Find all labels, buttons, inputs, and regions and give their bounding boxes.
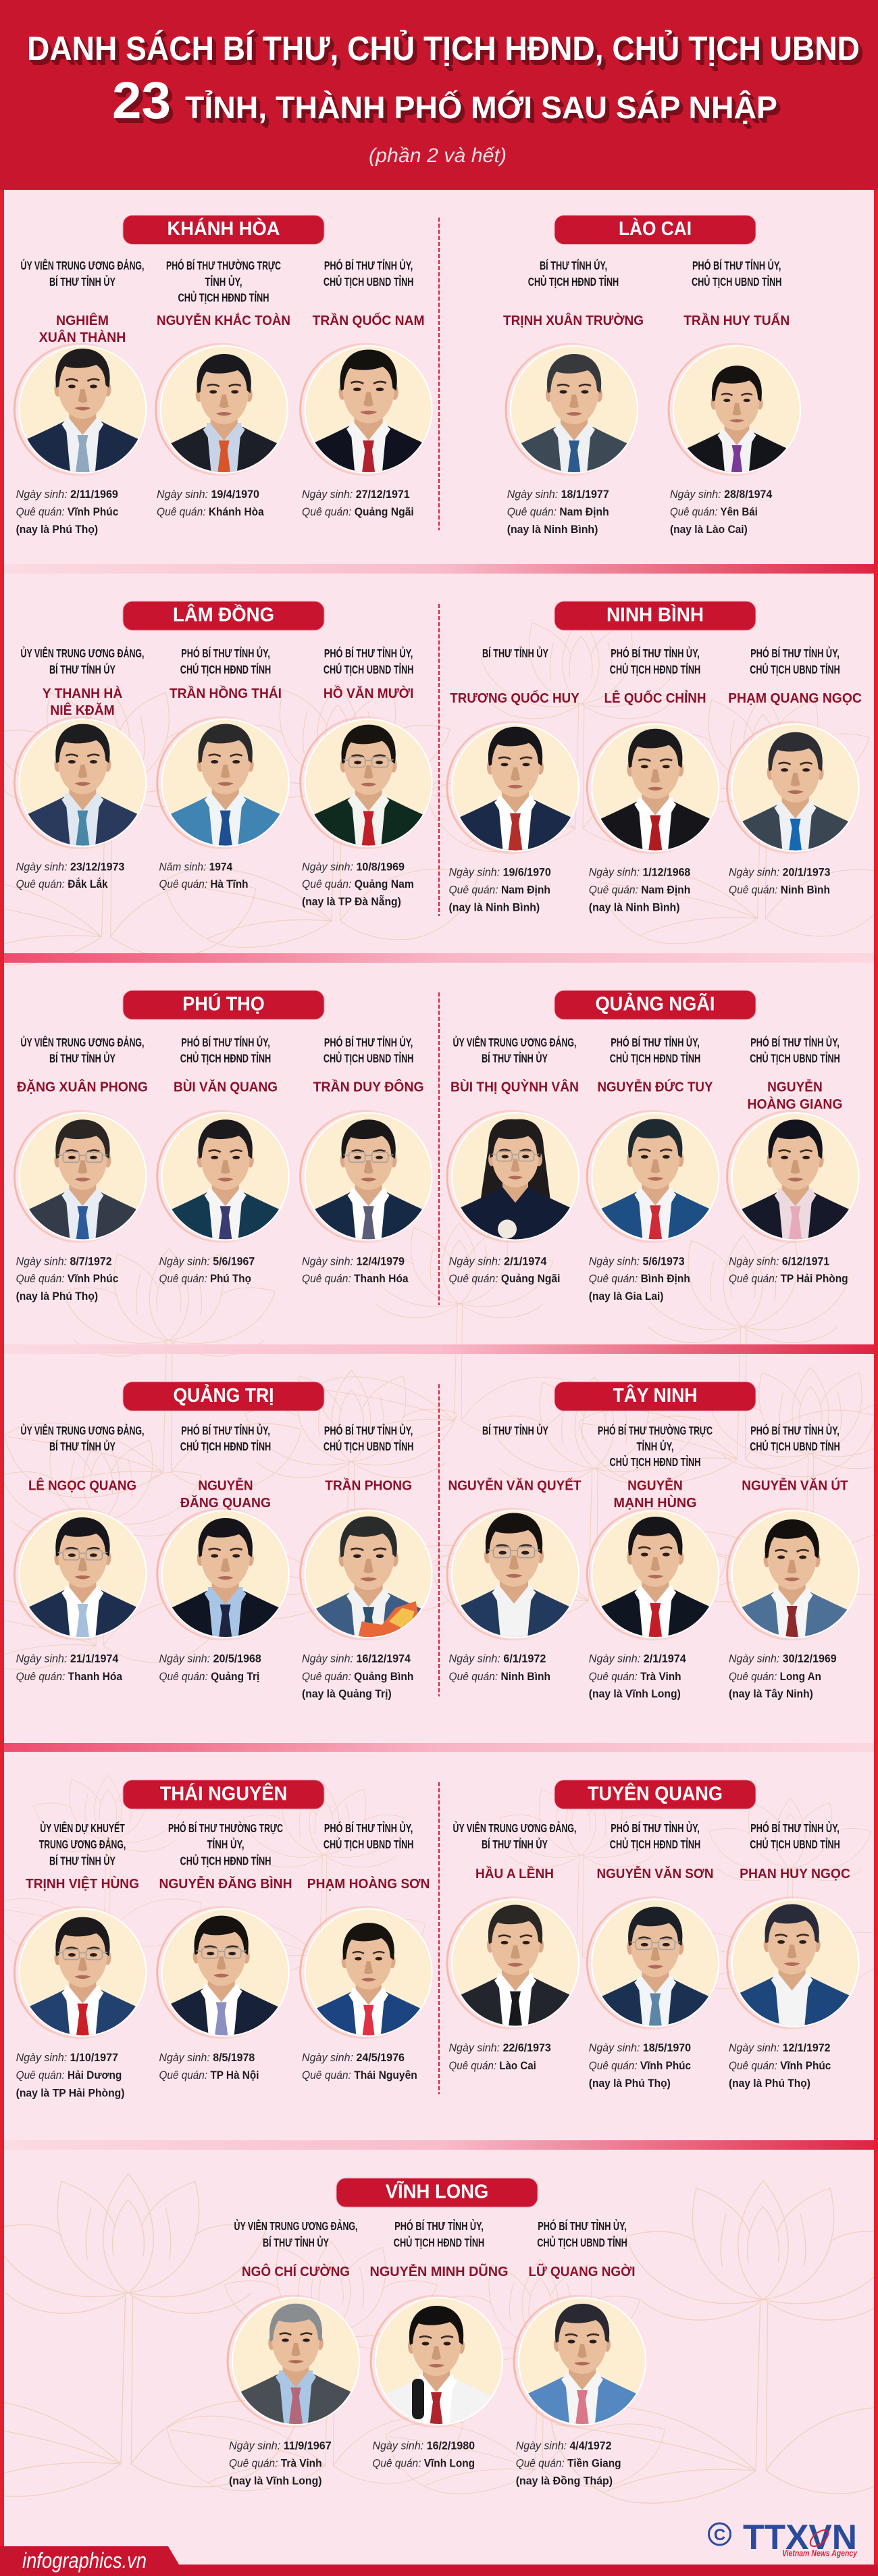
person: Nguyễn Văn Quyết bbox=[440, 1423, 588, 1684]
panel: Tuyên Quang bbox=[445, 1780, 862, 2090]
badge: Lào Cai bbox=[554, 216, 756, 245]
person: Nguyễn Văn Út: Ngày sinh: 30/12/1969 bbox=[729, 1653, 837, 1665]
person: Phạm Hoàng Sơn: PHẠM HOÀNG SƠN bbox=[307, 1876, 430, 1892]
person: Nguyễn Văn Sơn: Quê quán: Vĩnh Phúc bbox=[589, 2060, 691, 2072]
panel: Quảng Trị bbox=[12, 1382, 442, 1700]
person: Phan Huy Ngọc: Quê quán: Vĩnh Phúc bbox=[729, 2060, 831, 2072]
divider bbox=[438, 992, 440, 1305]
person: Phan Huy Ngọc bbox=[722, 1821, 862, 2090]
person: Hồ Văn Mười: Quê quán: Quảng Nam bbox=[302, 878, 414, 890]
person: Bùi Văn Quang bbox=[155, 1035, 296, 1285]
person: Nguyễn Khắc Toàn: NGUYỄN KHẮC TOÀN bbox=[157, 312, 290, 328]
person: Trịnh Xuân Trường: Ngày sinh: 18/1/1977 bbox=[507, 488, 609, 501]
person: Lữ Quang Ngời: CHỦ TỊCH UBND TỈNH bbox=[537, 2235, 627, 2249]
person: Nguyễn Văn Sơn: CHỦ TỊCH HĐND TỈNH bbox=[610, 1837, 700, 1851]
person: Y Thanh Hà Niê Kđăm: NIÊ KĐĂM bbox=[50, 702, 115, 718]
badge: Thái Nguyên bbox=[123, 1780, 324, 1809]
person: Nguyễn Hoàng Giang bbox=[725, 1035, 866, 1285]
person: Nguyễn Đăng Quang: Ngày sinh: 20/5/1968 bbox=[159, 1653, 261, 1665]
panel: Khánh Hòa bbox=[12, 216, 442, 536]
person: Trương Quốc Huy: (nay là Ninh Bình) bbox=[448, 902, 540, 914]
badge: Quảng Ngãi bbox=[554, 990, 756, 1019]
person: Ngô Chí Cường: BÍ THƯ TỈNH ỦY bbox=[263, 2235, 329, 2249]
person: Nguyễn Đăng Bình: Quê quán: TP Hà Nội bbox=[159, 2069, 259, 2081]
person: Bùi Văn Quang: Quê quán: Phú Thọ bbox=[159, 1273, 251, 1285]
person: Trần Huy Tuấn: Quê quán: Yên Bái bbox=[670, 506, 758, 518]
person: Trần Phong: TRẦN PHONG bbox=[325, 1478, 412, 1493]
person: Lữ Quang Ngời: PHÓ BÍ THƯ TỈNH ỦY, bbox=[538, 2219, 627, 2233]
person: Đặng Xuân Phong: ĐẶNG XUÂN PHONG bbox=[17, 1079, 148, 1095]
badge: Thái Nguyên: THÁI NGUYÊN bbox=[160, 1782, 287, 1804]
badge: Lào Cai: LÀO CAI bbox=[619, 217, 692, 240]
person: Trần Duy Đông: TRẦN DUY ĐÔNG bbox=[313, 1079, 424, 1095]
person: Bùi Thị Quỳnh Vân bbox=[447, 1035, 582, 1285]
person: Nguyễn Hoàng Giang: HOÀNG GIANG bbox=[747, 1096, 843, 1112]
person: Hầu A Lềnh: BÍ THƯ TỈNH ỦY bbox=[482, 1837, 548, 1851]
badge: Quảng Trị: QUẢNG TRỊ bbox=[173, 1384, 274, 1407]
title: TỈNH, THÀNH PHỐ MỚI SAU SÁP NHẬP bbox=[185, 90, 777, 125]
person: Hồ Văn Mười bbox=[299, 646, 439, 908]
footer site name: infographics.vn bbox=[22, 2548, 147, 2573]
person: Nguyễn Đăng Bình: PHÓ BÍ THƯ THƯỜNG TRỰC bbox=[168, 1821, 283, 1835]
person: Nghiêm Xuân Thành: Quê quán: Vĩnh Phúc bbox=[16, 506, 118, 518]
person: Phan Huy Ngọc: PHAN HUY NGỌC bbox=[740, 1866, 850, 1882]
badge: Khánh Hòa bbox=[123, 216, 324, 245]
person: Nguyễn Đăng Quang bbox=[155, 1423, 296, 1683]
divider bbox=[438, 1782, 440, 2094]
person: Nguyễn Mạnh Hùng: TỈNH ỦY, bbox=[636, 1439, 674, 1453]
person: Hồ Văn Mười: PHÓ BÍ THƯ TỈNH ỦY, bbox=[324, 646, 413, 660]
badge: Phú Thọ bbox=[123, 990, 324, 1019]
footer bar bbox=[0, 2546, 878, 2576]
person: Nguyễn Đăng Quang: PHÓ BÍ THƯ TỈNH ỦY, bbox=[181, 1423, 270, 1438]
person: Nguyễn Minh Dũng: PHÓ BÍ THƯ TỈNH ỦY, bbox=[394, 2219, 484, 2233]
person: Y Thanh Hà Niê Kđăm: Ngày sinh: 23/12/1973 bbox=[16, 861, 124, 874]
panel: Quảng Ngãi bbox=[447, 990, 866, 1303]
person: Nguyễn Văn Quyết: NGUYỄN VĂN QUYẾT bbox=[448, 1478, 582, 1493]
person: Nghiêm Xuân Thành: (nay là Phú Thọ) bbox=[16, 524, 98, 536]
person: Nguyễn Đăng Bình: Ngày sinh: 8/5/1978 bbox=[159, 2052, 255, 2064]
person: Trần Huy Tuấn: TRẦN HUY TUẤN bbox=[683, 313, 790, 328]
person: Nguyễn Đăng Quang: ĐĂNG QUANG bbox=[180, 1495, 271, 1511]
person: Trần Duy Đông bbox=[299, 1035, 439, 1285]
person: Trần Huy Tuấn bbox=[669, 258, 802, 536]
person: Ngô Chí Cường: ỦY VIÊN TRUNG ƯƠNG ĐẢNG, bbox=[234, 2219, 358, 2233]
person: Ngô Chí Cường: NGÔ CHÍ CƯỜNG bbox=[242, 2263, 350, 2279]
person: Trần Phong: Ngày sinh: 16/12/1974 bbox=[302, 1653, 411, 1665]
person: Nguyễn Mạnh Hùng: (nay là Vĩnh Long) bbox=[589, 1688, 681, 1700]
person: Nguyễn Mạnh Hùng: PHÓ BÍ THƯ THƯỜNG TRỰC bbox=[598, 1423, 713, 1438]
person: Phạm Hoàng Sơn: Quê quán: Thái Nguyên bbox=[302, 2069, 417, 2081]
person: Phạm Hoàng Sơn: Ngày sinh: 24/5/1976 bbox=[302, 2052, 405, 2064]
person: Trịnh Xuân Trường: (nay là Ninh Bình) bbox=[507, 524, 598, 536]
person: Bùi Văn Quang: CHỦ TỊCH HĐND TỈNH bbox=[180, 1051, 271, 1065]
person: Trần Phong: Quê quán: Quảng Bình bbox=[302, 1671, 413, 1683]
person: Trịnh Việt Hùng: TRỊNH VIỆT HÙNG bbox=[26, 1875, 139, 1892]
person: Trần Quốc Nam bbox=[299, 259, 432, 517]
person: Trương Quốc Huy: BÍ THƯ TỈNH ỦY bbox=[482, 646, 548, 660]
person: Y Thanh Hà Niê Kđăm: BÍ THƯ TỈNH ỦY bbox=[49, 662, 115, 676]
person: Lê Ngọc Quang bbox=[12, 1423, 153, 1683]
person: Nguyễn Minh Dũng: Ngày sinh: 16/2/1980 bbox=[372, 2440, 475, 2452]
person: Nguyễn Đức Tuy: NGUYỄN ĐỨC TUY bbox=[597, 1079, 713, 1095]
person: Trần Duy Đông: Quê quán: Thanh Hóa bbox=[302, 1273, 409, 1285]
person: Bùi Văn Quang: PHÓ BÍ THƯ TỈNH ỦY, bbox=[181, 1035, 270, 1049]
person: Nguyễn Đăng Bình: TỈNH ỦY, bbox=[207, 1837, 244, 1851]
person: Nguyễn Minh Dũng: CHỦ TỊCH HĐND TỈNH bbox=[394, 2235, 484, 2249]
person: Phan Huy Ngọc: CHỦ TỊCH UBND TỈNH bbox=[750, 1837, 840, 1851]
lotus line-art background bbox=[0, 617, 878, 2503]
person: Nguyễn Minh Dũng bbox=[366, 2219, 508, 2470]
person: Đặng Xuân Phong: BÍ THƯ TỈNH ỦY bbox=[49, 1051, 115, 1065]
person: Ngô Chí Cường bbox=[228, 2219, 364, 2487]
badge: Ninh Bình bbox=[554, 601, 756, 630]
person: Nguyễn Đức Tuy: Quê quán: Bình Định bbox=[589, 1273, 690, 1285]
person: Trương Quốc Huy: Quê quán: Nam Định bbox=[448, 884, 550, 896]
person: Lữ Quang Ngời: (nay là Đồng Tháp) bbox=[516, 2475, 613, 2487]
person: Trịnh Xuân Trường: TRỊNH XUÂN TRƯỜNG bbox=[503, 312, 644, 328]
person: Nguyễn Đức Tuy bbox=[585, 1035, 725, 1303]
person: Trần Hồng Thái bbox=[155, 646, 296, 890]
panel: Lâm Đồng bbox=[12, 601, 439, 908]
logo: TTXVN: C bbox=[714, 2526, 725, 2544]
badge: Tuyên Quang: TUYÊN QUANG bbox=[588, 1782, 723, 1804]
person: Hồ Văn Mười: Ngày sinh: 10/8/1969 bbox=[302, 861, 405, 874]
person: Phạm Hoàng Sơn bbox=[301, 1821, 435, 2081]
divider bbox=[438, 218, 440, 530]
person: Lê Ngọc Quang: Ngày sinh: 21/1/1974 bbox=[16, 1653, 119, 1665]
person: Nguyễn Mạnh Hùng: CHỦ TỊCH HĐND TỈNH bbox=[609, 1455, 701, 1469]
person: Nguyễn Khắc Toàn bbox=[154, 258, 294, 518]
person: Nguyễn Văn Quyết: BÍ THƯ TỈNH ỦY bbox=[482, 1423, 548, 1438]
person: Trần Phong: PHÓ BÍ THƯ TỈNH ỦY, bbox=[324, 1423, 413, 1438]
badge: Lâm Đồng: LÂM ĐỒNG bbox=[173, 603, 274, 626]
person: Nguyễn Khắc Toàn: Quê quán: Khánh Hòa bbox=[157, 506, 265, 518]
person: Trần Hồng Thái: Năm sinh: 1974 bbox=[159, 861, 233, 874]
person: Lê Quốc Chỉnh bbox=[585, 646, 725, 914]
badge: Vĩnh Long bbox=[336, 2178, 538, 2207]
person: Hầu A Lềnh: Ngày sinh: 22/6/1973 bbox=[448, 2042, 551, 2054]
person: Trịnh Xuân Trường bbox=[503, 258, 644, 536]
person: Đặng Xuân Phong: (nay là Phú Thọ) bbox=[16, 1290, 98, 1303]
person: Nguyễn Văn Út: Quê quán: Long An bbox=[729, 1671, 821, 1683]
person: Trần Huy Tuấn: Ngày sinh: 28/8/1974 bbox=[670, 488, 773, 501]
person: Nguyễn Mạnh Hùng: NGUYỄN bbox=[627, 1478, 683, 1493]
person: Trần Quốc Nam: PHÓ BÍ THƯ TỈNH ỦY, bbox=[324, 258, 413, 272]
person: Nguyễn Minh Dũng: Quê quán: Vĩnh Long bbox=[372, 2458, 475, 2470]
person: Nguyễn Văn Quyết: Quê quán: Ninh Bình bbox=[448, 1671, 550, 1683]
person: Ngô Chí Cường: Ngày sinh: 11/9/1967 bbox=[229, 2440, 332, 2452]
badge: Khánh Hòa: KHÁNH HÒA bbox=[167, 217, 280, 240]
person: Ngô Chí Cường: Quê quán: Trà Vinh bbox=[229, 2458, 322, 2470]
badge: Tây Ninh: TÂY NINH bbox=[613, 1384, 697, 1407]
header band bbox=[0, 0, 878, 190]
person: Hồ Văn Mười: HỒ VĂN MƯỜI bbox=[324, 685, 413, 701]
person: Nguyễn Văn Sơn: (nay là Phú Thọ) bbox=[589, 2077, 671, 2090]
person: Trần Huy Tuấn: PHÓ BÍ THƯ TỈNH ỦY, bbox=[692, 258, 781, 272]
person: Nguyễn Mạnh Hùng bbox=[585, 1423, 725, 1700]
person: Trần Quốc Nam: TRẦN QUỐC NAM bbox=[313, 312, 425, 328]
person: Nguyễn Đăng Bình bbox=[151, 1821, 292, 2081]
person: Nguyễn Hoàng Giang: PHÓ BÍ THƯ TỈNH ỦY, bbox=[750, 1035, 840, 1049]
person: Nguyễn Đức Tuy: Ngày sinh: 5/6/1973 bbox=[589, 1256, 685, 1268]
person: Nguyễn Văn Út bbox=[722, 1423, 862, 1700]
divider bbox=[438, 1384, 440, 1696]
person: Trần Huy Tuấn: (nay là Lào Cai) bbox=[670, 524, 748, 536]
person: Đặng Xuân Phong bbox=[12, 1035, 153, 1303]
person: Trịnh Việt Hùng: BÍ THƯ TỈNH ỦY bbox=[49, 1853, 115, 1867]
person: Nghiêm Xuân Thành: Ngày sinh: 2/11/1969 bbox=[16, 488, 118, 501]
person: Nghiêm Xuân Thành: NGHIÊM bbox=[56, 312, 109, 328]
person: Trịnh Việt Hùng bbox=[12, 1821, 153, 2100]
person: Nguyễn Hoàng Giang: CHỦ TỊCH UBND TỈNH bbox=[750, 1051, 840, 1065]
person: Nghiêm Xuân Thành bbox=[12, 258, 153, 536]
person: Lữ Quang Ngời bbox=[512, 2219, 652, 2487]
badge: Vĩnh Long: VĨNH LONG bbox=[386, 2179, 488, 2202]
subtitle: (phần 2 và hết) bbox=[369, 145, 507, 167]
person: Trịnh Việt Hùng: (nay là TP Hải Phòng) bbox=[16, 2088, 124, 2100]
person: Lữ Quang Ngời: LỮ QUANG NGỜI bbox=[528, 2263, 635, 2279]
person: Trần Quốc Nam: CHỦ TỊCH UBND TỈNH bbox=[324, 274, 413, 288]
badge: Tây Ninh bbox=[554, 1382, 756, 1411]
person: Nguyễn Đăng Quang: Quê quán: Quảng Trị bbox=[159, 1671, 259, 1683]
person: Nguyễn Hoàng Giang: Ngày sinh: 6/12/1971 bbox=[729, 1256, 829, 1268]
person: Hồ Văn Mười: (nay là TP Đà Nẵng) bbox=[302, 894, 401, 908]
badge: Phú Thọ: PHÚ THỌ bbox=[182, 992, 265, 1015]
person: Y Thanh Hà Niê Kđăm bbox=[12, 646, 153, 890]
person: Trịnh Việt Hùng: Quê quán: Hải Dương bbox=[16, 2069, 122, 2081]
person: Lê Ngọc Quang: LÊ NGỌC QUANG bbox=[28, 1477, 136, 1493]
person: Nguyễn Đăng Bình: NGUYỄN ĐĂNG BÌNH bbox=[159, 1876, 292, 1892]
person: Trần Duy Đông: PHÓ BÍ THƯ TỈNH ỦY, bbox=[324, 1035, 413, 1049]
person: Lê Quốc Chỉnh: Quê quán: Nam Định bbox=[589, 884, 690, 896]
person: Nguyễn Mạnh Hùng: Ngày sinh: 2/1/1974 bbox=[589, 1653, 687, 1665]
person: Trịnh Việt Hùng: TRUNG ƯƠNG ĐẢNG, bbox=[39, 1837, 126, 1851]
panel: Phú Thọ bbox=[12, 990, 439, 1303]
person: Phạm Quang Ngọc bbox=[725, 646, 866, 896]
panel: Lào Cai bbox=[503, 216, 802, 536]
person: Bùi Thị Quỳnh Vân: Ngày sinh: 2/1/1974 bbox=[448, 1256, 547, 1268]
person: Trần Phong: (nay là Quảng Trị) bbox=[302, 1688, 392, 1700]
person: Nghiêm Xuân Thành: ỦY VIÊN TRUNG ƯƠNG ĐẢNG, bbox=[20, 258, 145, 272]
person: Trần Hồng Thái: Quê quán: Hà Tĩnh bbox=[159, 878, 249, 890]
person: Nghiêm Xuân Thành: BÍ THƯ TỈNH ỦY bbox=[49, 274, 115, 288]
person: Lữ Quang Ngời: Quê quán: Tiền Giang bbox=[516, 2458, 621, 2470]
person: Phan Huy Ngọc: Ngày sinh: 12/1/1972 bbox=[729, 2042, 831, 2054]
person: Lê Ngọc Quang: Quê quán: Thanh Hóa bbox=[16, 1671, 123, 1683]
person: Đặng Xuân Phong: Ngày sinh: 8/7/1972 bbox=[16, 1256, 112, 1268]
panel: Vĩnh Long bbox=[228, 2178, 652, 2487]
person: Nguyễn Văn Út: PHÓ BÍ THƯ TỈNH ỦY, bbox=[750, 1423, 840, 1438]
person: Phan Huy Ngọc: PHÓ BÍ THƯ TỈNH ỦY, bbox=[750, 1821, 840, 1835]
person: Nguyễn Đức Tuy: CHỦ TỊCH HĐND TỈNH bbox=[610, 1051, 700, 1065]
person: Nguyễn Khắc Toàn: Ngày sinh: 19/4/1970 bbox=[157, 488, 259, 501]
person: Bùi Thị Quỳnh Vân: ỦY VIÊN TRUNG ƯƠNG ĐẢNG, bbox=[453, 1035, 577, 1049]
person: Phạm Quang Ngọc: Quê quán: Ninh Bình bbox=[729, 884, 830, 896]
person: Lê Ngọc Quang: ỦY VIÊN TRUNG ƯƠNG ĐẢNG, bbox=[20, 1423, 145, 1438]
person: Phạm Quang Ngọc: PHẠM QUANG NGỌC bbox=[728, 690, 862, 706]
person: Nguyễn Văn Út: CHỦ TỊCH UBND TỈNH bbox=[750, 1439, 840, 1453]
person: Trần Phong: CHỦ TỊCH UBND TỈNH bbox=[324, 1439, 413, 1453]
person: Bùi Thị Quỳnh Vân: BÍ THƯ TỈNH ỦY bbox=[482, 1051, 548, 1065]
person: Trương Quốc Huy: TRƯƠNG QUỐC HUY bbox=[450, 690, 579, 706]
person: Trần Hồng Thái: TRẦN HỒNG THÁI bbox=[170, 685, 282, 701]
person: Nguyễn Hoàng Giang: Quê quán: TP Hải Phòng bbox=[729, 1273, 848, 1285]
person: Lê Quốc Chỉnh: LÊ QUỐC CHỈNH bbox=[604, 690, 706, 706]
person: Phạm Hoàng Sơn: CHỦ TỊCH UBND TỈNH bbox=[324, 1837, 413, 1851]
person: Trần Hồng Thái: PHÓ BÍ THƯ TỈNH ỦY, bbox=[181, 646, 270, 660]
person: Trương Quốc Huy bbox=[445, 646, 586, 914]
person: Bùi Thị Quỳnh Vân: Quê quán: Quảng Ngãi bbox=[448, 1273, 561, 1285]
badge: Quảng Ngãi: QUẢNG NGÃI bbox=[596, 992, 715, 1015]
person: Đặng Xuân Phong: Quê quán: Vĩnh Phúc bbox=[16, 1273, 118, 1285]
person: Lê Ngọc Quang: BÍ THƯ TỈNH ỦY bbox=[49, 1439, 115, 1453]
panel: Ninh Bình bbox=[445, 601, 866, 914]
badge: Ninh Bình: NINH BÌNH bbox=[606, 603, 704, 626]
person: Phạm Hoàng Sơn: PHÓ BÍ THƯ TỈNH ỦY, bbox=[324, 1821, 413, 1835]
person: Bùi Văn Quang: BÙI VĂN QUANG bbox=[174, 1079, 278, 1095]
title bbox=[27, 29, 860, 130]
person: Trịnh Xuân Trường: Quê quán: Nam Định bbox=[507, 506, 609, 518]
person: Phạm Quang Ngọc: PHÓ BÍ THƯ TỈNH ỦY, bbox=[750, 646, 840, 660]
logo: TTXVN: Vietnam News Agency bbox=[782, 2548, 858, 2558]
person: Nguyễn Khắc Toàn: CHỦ TỊCH HĐND TỈNH bbox=[178, 291, 269, 304]
person: Nguyễn Văn Quyết: Ngày sinh: 6/1/1972 bbox=[448, 1653, 546, 1665]
person: Bùi Văn Quang: Ngày sinh: 5/6/1967 bbox=[159, 1256, 255, 1268]
person: Trần Huy Tuấn: CHỦ TỊCH UBND TỈNH bbox=[692, 274, 781, 288]
person: Ngô Chí Cường: (nay là Vĩnh Long) bbox=[229, 2475, 322, 2487]
person: Nguyễn Khắc Toàn: TỈNH ỦY, bbox=[205, 274, 242, 288]
person: Lê Quốc Chỉnh: CHỦ TỊCH HĐND TỈNH bbox=[610, 662, 700, 676]
person: Lê Quốc Chỉnh: (nay là Ninh Bình) bbox=[589, 902, 679, 914]
person: Hầu A Lềnh: Quê quán: Lào Cai bbox=[448, 2060, 536, 2072]
person: Lê Quốc Chỉnh: PHÓ BÍ THƯ TỈNH ỦY, bbox=[611, 646, 700, 660]
person: Y Thanh Hà Niê Kđăm: Y THANH HÀ bbox=[43, 686, 122, 701]
person: Nguyễn Văn Út: NGUYỄN VĂN ÚT bbox=[742, 1477, 848, 1493]
person: Y Thanh Hà Niê Kđăm: ỦY VIÊN TRUNG ƯƠNG ĐẢNG, bbox=[20, 646, 145, 660]
person: Trần Quốc Nam: Ngày sinh: 27/12/1971 bbox=[302, 488, 410, 501]
person: Trần Hồng Thái: CHỦ TỊCH HĐND TỈNH bbox=[180, 662, 271, 676]
person: Phạm Quang Ngọc: CHỦ TỊCH UBND TỈNH bbox=[750, 662, 840, 676]
badge: Quảng Trị bbox=[123, 1382, 324, 1411]
person: Trần Phong bbox=[294, 1423, 442, 1700]
person: Đặng Xuân Phong: ỦY VIÊN TRUNG ƯƠNG ĐẢNG, bbox=[20, 1035, 145, 1049]
person: Phạm Quang Ngọc: Ngày sinh: 20/1/1973 bbox=[729, 866, 831, 878]
person: Nguyễn Mạnh Hùng: Quê quán: Trà Vinh bbox=[589, 1671, 681, 1683]
section separator bands bbox=[0, 564, 878, 2150]
person: Lê Quốc Chỉnh: Ngày sinh: 1/12/1968 bbox=[589, 866, 690, 878]
person: Y Thanh Hà Niê Kđăm: Quê quán: Đắk Lắk bbox=[16, 878, 108, 890]
person: Nguyễn Đăng Quang: CHỦ TỊCH HĐND TỈNH bbox=[180, 1439, 271, 1453]
person: Trịnh Việt Hùng: Ngày sinh: 1/10/1977 bbox=[16, 2052, 118, 2064]
title: 23 bbox=[112, 72, 171, 130]
person: Lữ Quang Ngời: Ngày sinh: 4/4/1972 bbox=[516, 2440, 612, 2452]
person: Nguyễn Khắc Toàn: PHÓ BÍ THƯ THƯỜNG TRỰC bbox=[166, 258, 281, 272]
person: Trần Quốc Nam: Quê quán: Quảng Ngãi bbox=[302, 506, 414, 518]
person: Nguyễn Đăng Bình: CHỦ TỊCH HĐND TỈNH bbox=[180, 1853, 272, 1867]
person: Hồ Văn Mười: CHỦ TỊCH UBND TỈNH bbox=[324, 662, 413, 676]
person: Nguyễn Văn Út: (nay là Tây Ninh) bbox=[729, 1688, 813, 1700]
person: Nguyễn Văn Sơn: Ngày sinh: 18/5/1970 bbox=[589, 2042, 691, 2054]
person: Nguyễn Đức Tuy: PHÓ BÍ THƯ TỈNH ỦY, bbox=[611, 1035, 700, 1049]
logo: TTXVN: TTXVN bbox=[743, 2518, 857, 2557]
person: Bùi Thị Quỳnh Vân: BÙI THỊ QUỲNH VÂN bbox=[450, 1079, 579, 1095]
person: Nguyễn Văn Sơn bbox=[585, 1821, 725, 2090]
panel: Tây Ninh bbox=[440, 1382, 862, 1700]
person: Trương Quốc Huy: Ngày sinh: 19/6/1970 bbox=[448, 866, 551, 878]
badge: Tuyên Quang bbox=[554, 1780, 756, 1809]
person: Nguyễn Mạnh Hùng: MẠNH HÙNG bbox=[613, 1494, 697, 1511]
person: Nguyễn Văn Sơn: PHÓ BÍ THƯ TỈNH ỦY, bbox=[611, 1821, 700, 1835]
person: Hầu A Lềnh: ỦY VIÊN TRUNG ƯƠNG ĐẢNG, bbox=[453, 1821, 577, 1835]
person: Nghiêm Xuân Thành: XUÂN THÀNH bbox=[39, 329, 126, 345]
person: Phan Huy Ngọc: (nay là Phú Thọ) bbox=[729, 2077, 810, 2090]
person: Nguyễn Đức Tuy: (nay là Gia Lai) bbox=[589, 1290, 663, 1303]
person: Trịnh Xuân Trường: CHỦ TỊCH HĐND TỈNH bbox=[528, 274, 619, 288]
person: Trần Duy Đông: CHỦ TỊCH UBND TỈNH bbox=[324, 1051, 413, 1065]
person: Trịnh Việt Hùng: ỦY VIÊN DỰ KHUYẾT bbox=[40, 1821, 125, 1835]
person: Nguyễn Đăng Quang: NGUYỄN bbox=[198, 1478, 253, 1493]
person: Hầu A Lềnh: HẦU A LỀNH bbox=[475, 1866, 554, 1882]
badge: Lâm Đồng bbox=[123, 601, 324, 630]
person: Trần Duy Đông: Ngày sinh: 12/4/1979 bbox=[302, 1256, 405, 1268]
person: Hầu A Lềnh bbox=[445, 1821, 586, 2072]
person: Nguyễn Văn Sơn: NGUYỄN VĂN SƠN bbox=[597, 1866, 713, 1882]
divider bbox=[438, 604, 440, 916]
panel: Thái Nguyên bbox=[12, 1780, 435, 2100]
person: Trịnh Xuân Trường: BÍ THƯ TỈNH ỦY, bbox=[540, 258, 607, 272]
person: Nguyễn Minh Dũng: NGUYỄN MINH DŨNG bbox=[370, 2263, 508, 2279]
person: Nguyễn Hoàng Giang: NGUYỄN bbox=[767, 1080, 823, 1095]
